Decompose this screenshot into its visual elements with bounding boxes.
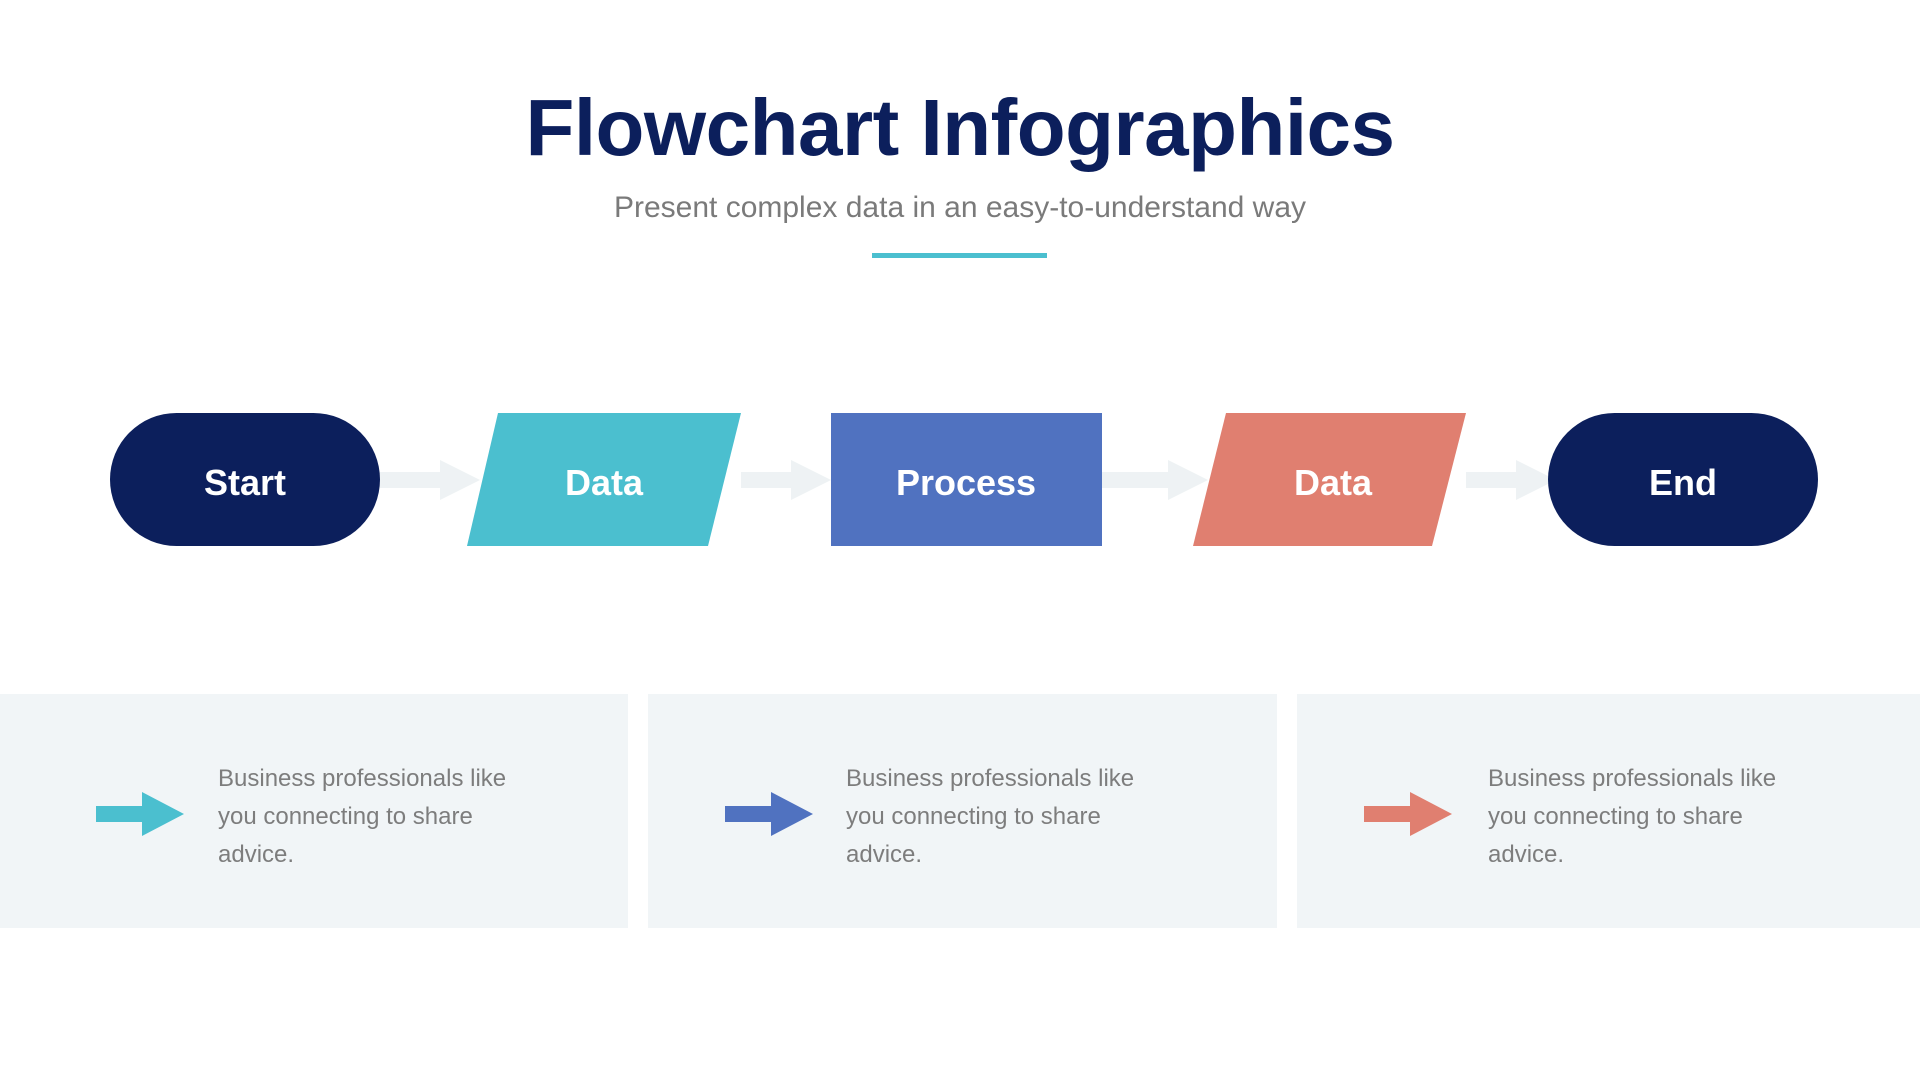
panel 1 (0, 694, 628, 928)
data node 1: Data (565, 462, 644, 503)
underline accent (872, 253, 1047, 258)
end node: End (1649, 462, 1717, 503)
title: Flowchart Infographics (525, 83, 1395, 172)
start node (110, 413, 380, 546)
data node 2: Data (1294, 462, 1373, 503)
text: Business professionals like you connecting to share advice. (1488, 765, 1776, 868)
data node 2 (1193, 413, 1466, 546)
flowchart (110, 413, 1818, 546)
subtitle: Present complex data in an easy-to-understand way (614, 191, 1306, 224)
start node: Start (204, 462, 286, 503)
end node (1548, 413, 1818, 546)
text: Business professionals like you connecting to share advice. (846, 765, 1134, 868)
process node (831, 413, 1102, 546)
icon: coral arrow (1364, 792, 1452, 836)
icon: blue arrow (725, 792, 813, 836)
icon: teal arrow (96, 792, 184, 836)
connector arrows (380, 460, 1556, 500)
data node 1 (467, 413, 741, 546)
panel 3 (1297, 694, 1920, 928)
panel 2 (648, 694, 1277, 928)
process node: Process (896, 462, 1036, 503)
text: Business professionals like you connecting to share advice. (218, 765, 506, 868)
